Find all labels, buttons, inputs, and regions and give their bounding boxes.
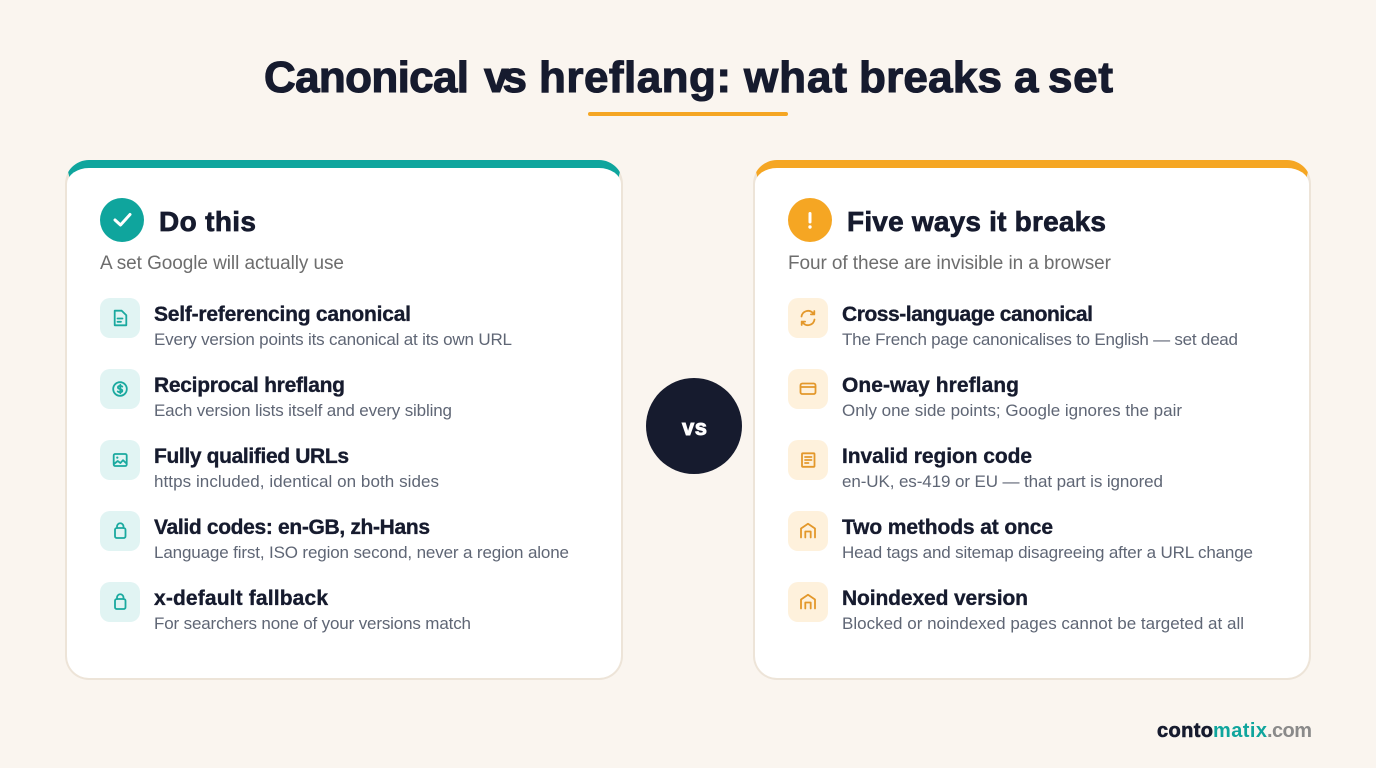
item: valid codes: Valid codes: en-GB, zh-Hans <box>154 516 430 539</box>
brand footer: conto <box>1157 720 1213 742</box>
item: invalid region code: en-UK, es-419 or EU — that part is ignored <box>842 472 1163 491</box>
vs badge: vs <box>682 415 707 440</box>
title <box>264 53 1113 102</box>
item: x-default fallback <box>100 582 471 633</box>
item: fully qualified urls: https included, identical on both sides <box>154 472 439 491</box>
title: a <box>1014 53 1039 102</box>
item: self-referencing canonical: Every version points its canonical at its own URL <box>154 330 512 349</box>
brand footer <box>1157 720 1312 742</box>
item: reciprocal hreflang <box>100 369 452 420</box>
title: set <box>1048 53 1113 102</box>
item: invalid region code <box>788 440 1163 491</box>
card: do this background <box>65 160 623 680</box>
item: x-default fallback: x-default fallback <box>154 587 328 610</box>
item: reciprocal hreflang: Each version lists itself and every sibling <box>154 401 452 420</box>
title: hreflang: <box>539 53 731 102</box>
heading: five ways it breaks: Five ways it breaks <box>847 206 1106 237</box>
item: noindexed version: Blocked or noindexed pages cannot be targeted at all <box>842 614 1244 633</box>
icon: check badge <box>100 198 144 242</box>
item: two methods at once: Head tags and sitemap disagreeing after a URL change <box>842 543 1253 562</box>
title: vs <box>484 53 527 102</box>
item: self-referencing canonical: Self-referencing canonical <box>154 303 411 326</box>
item: fully qualified urls: Fully qualified URLs <box>154 445 349 468</box>
item: one-way hreflang: Only one side points; Google ignores the pair <box>842 401 1182 420</box>
title: what <box>743 53 847 102</box>
item: self-referencing canonical <box>100 298 512 349</box>
item: valid codes <box>100 511 569 562</box>
title: Canonical <box>264 53 469 102</box>
item: noindexed version <box>788 582 1244 633</box>
brand footer: .com <box>1267 720 1312 742</box>
subtitle: five ways: Four of these are invisible in a browser <box>788 253 1112 274</box>
item: noindexed version: Noindexed version <box>842 587 1028 610</box>
icon: warning badge <box>788 198 832 242</box>
item: reciprocal hreflang: Reciprocal hreflang <box>154 374 345 397</box>
item: invalid region code: Invalid region code <box>842 445 1032 468</box>
card: five ways it breaks background <box>753 160 1311 680</box>
item: cross-language canonical <box>788 298 1238 349</box>
item: valid codes: Language first, ISO region second, never a region alone <box>154 543 569 562</box>
panel: five ways it breaks <box>788 198 1253 633</box>
item: two methods at once: Two methods at once <box>842 516 1053 539</box>
item: one-way hreflang: One-way hreflang <box>842 374 1019 397</box>
item: one-way hreflang <box>788 369 1182 420</box>
item: cross-language canonical: The French page canonicalises to English — set dead <box>842 330 1238 349</box>
subtitle: do this: A set Google will actually use <box>100 253 344 274</box>
heading: do this: Do this <box>159 206 256 237</box>
item: x-default fallback: For searchers none of your versions match <box>154 614 471 633</box>
title: breaks <box>859 53 1002 102</box>
title underline <box>588 112 788 116</box>
brand footer: matix <box>1213 720 1267 742</box>
item: cross-language canonical: Cross-language canonical <box>842 303 1093 326</box>
item: fully qualified urls <box>100 440 439 491</box>
vs badge <box>646 378 742 474</box>
item: two methods at once <box>788 511 1253 562</box>
panel: do this <box>100 198 569 633</box>
